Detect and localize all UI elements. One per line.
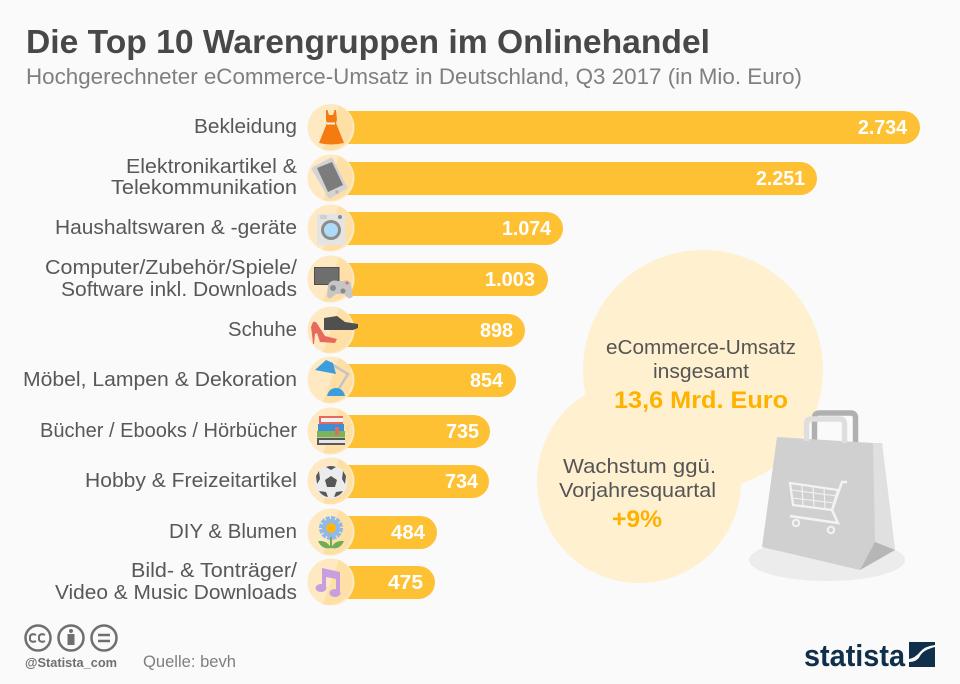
- row: Hobby & Freizeitartikel: 734: [445, 471, 479, 493]
- callout: growth: Wachstum ggü.: [563, 455, 716, 478]
- row: Schuhe: 898: [480, 320, 513, 342]
- row: Bild- & Tonträger: [55, 558, 435, 606]
- row: Haushaltswaren & -geräte: [55, 204, 563, 252]
- row: Bild- & Tonträger: 475: [388, 572, 423, 594]
- icon: cart: [790, 482, 847, 533]
- row: Schuhe: Schuhe: [228, 318, 297, 341]
- row: Elektronikartikel & Telekommunikation: [111, 154, 817, 202]
- row: Computer/Zubehör/Spiele/Software: 1.003: [485, 269, 535, 291]
- row: Hobby & Freizeitartikel: [85, 458, 489, 504]
- logo: statista: statista: [804, 638, 906, 673]
- row: Haushaltswaren & -geräte: Haushaltswaren & -geräte: [55, 216, 297, 239]
- handle: @Statista_com: [25, 655, 117, 670]
- row: Bekleidung: Bekleidung: [194, 115, 297, 138]
- row: DIY & Blumen: [169, 508, 437, 556]
- callout: growth: [559, 455, 716, 533]
- title: Die Top 10 Warengruppen im Onlinehandel: [26, 23, 710, 60]
- row: Bild- & Tonträger: Bild- & Tonträger/: [131, 559, 297, 582]
- row: Möbel, Lampen & Dekoration: Möbel, Lampen & Dekoration: [23, 368, 297, 391]
- icons: creative commons licence: [26, 626, 116, 650]
- callout: total revenue: 13,6 Mrd. Euro: [614, 387, 788, 414]
- row: Elektronikartikel & Telekommunikation: 2.251: [756, 168, 805, 190]
- callout: growth: Vorjahresquartal: [559, 479, 716, 502]
- row: Schuhe: [228, 306, 525, 354]
- callout: total revenue: [606, 336, 796, 414]
- callout: total revenue: eCommerce-Umsatz: [606, 336, 796, 359]
- row: Möbel, Lampen & Dekoration: 854: [470, 370, 504, 392]
- row: Bild- & Tonträger: Video & Music Downloads: [55, 581, 297, 604]
- row: Elektronikartikel & Telekommunikation: Telekommunikation: [111, 176, 297, 199]
- row: Bücher / Ebooks / Hörbücher: 735: [446, 421, 479, 443]
- row: Computer/Zubehör/Spiele/Software: [45, 256, 548, 302]
- row: Bücher / Ebooks / Hörbücher: [40, 408, 490, 454]
- row: DIY & Blumen: DIY & Blumen: [169, 520, 297, 543]
- row: Bekleidung: 2.734: [858, 117, 908, 139]
- source: Quelle: bevh: [143, 653, 236, 671]
- icon: shopping bag: [749, 413, 905, 581]
- row: Möbel, Lampen & Dekoration: [23, 356, 516, 404]
- row: Hobby & Freizeitartikel: Hobby & Freizeitartikel: [85, 469, 297, 492]
- row: Bekleidung: [194, 104, 920, 151]
- callout: total revenue: insgesamt: [653, 360, 749, 383]
- row: Computer/Zubehör/Spiele/Software: Computer/Zubehör/Spiele/: [45, 256, 297, 279]
- callout bubbles: [537, 250, 823, 583]
- callout: growth: +9%: [612, 506, 662, 533]
- row: Bücher / Ebooks / Hörbücher: Bücher / Ebooks / Hörbücher: [40, 419, 297, 442]
- row: Computer/Zubehör/Spiele/Software: Software inkl. Downloads: [61, 278, 297, 301]
- row: DIY & Blumen: 484: [391, 522, 426, 544]
- row: Haushaltswaren & -geräte: 1.074: [502, 218, 552, 240]
- subtitle: Hochgerechneter eCommerce-Umsatz in Deutschland, Q3 2017 (in Mio. Euro): [26, 64, 802, 89]
- row: Elektronikartikel & Telekommunikation: Elektronikartikel &: [126, 155, 297, 178]
- bar chart: [23, 104, 920, 606]
